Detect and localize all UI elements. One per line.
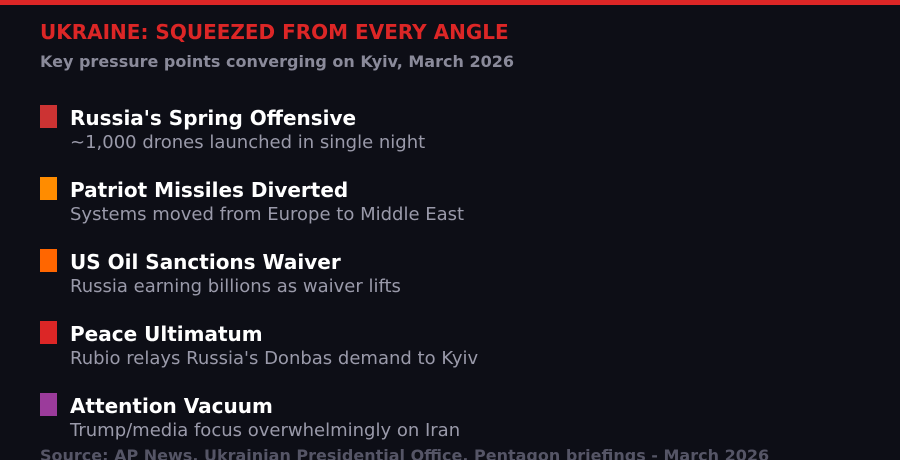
item: US Oil Sanctions Waiver: US Oil Sanctions Waiver [70, 250, 341, 274]
item: Peace Ultimatum: Rubio relays Russia's Donbas demand to Kyiv [70, 348, 478, 369]
item: Peace Ultimatum: Peace Ultimatum [70, 322, 263, 346]
title: UKRAINE: SQUEEZED FROM EVERY ANGLE [40, 20, 509, 44]
subtitle: Key pressure points converging on Kyiv, March 2026 [40, 52, 514, 71]
item: US Oil Sanctions Waiver [40, 249, 401, 297]
item: Attention Vacuum: Trump/media focus overwhelmingly on Iran [69, 420, 460, 441]
item: Russia's Spring Offensive: Russia's Spring Offensive [70, 106, 356, 130]
item: Attention Vacuum: Attention Vacuum [70, 394, 273, 418]
item: US Oil Sanctions Waiver: Russia earning billions as waiver lifts [70, 276, 401, 297]
item: Patriot Missiles Diverted: Systems moved from Europe to Middle East [70, 204, 464, 225]
item: Patriot Missiles Diverted [40, 177, 464, 225]
item: Attention Vacuum [40, 393, 460, 441]
item: Peace Ultimatum [40, 321, 478, 369]
item: Patriot Missiles Diverted: Patriot Missiles Diverted [70, 178, 348, 202]
item: Russia's Spring Offensive [40, 105, 425, 153]
item: Russia's Spring Offensive: ~1,000 drones launched in single night [70, 132, 425, 153]
